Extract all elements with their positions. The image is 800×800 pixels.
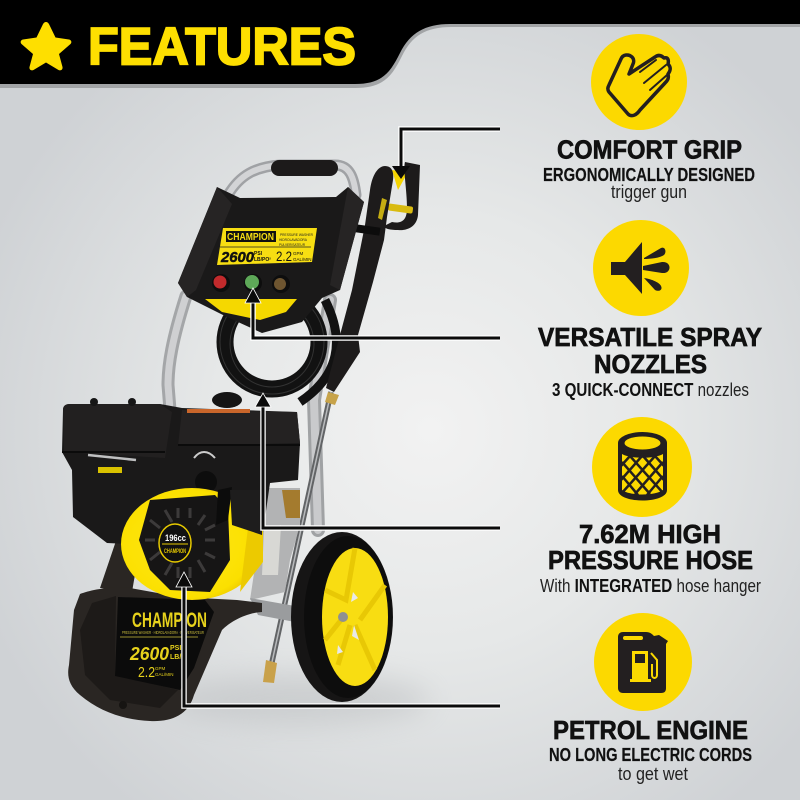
frame bucket: GAL/MIN [155, 672, 174, 677]
heading: COMFORT GRIP [557, 134, 742, 164]
control panel: PRESSURE WASHER [280, 232, 313, 237]
feature: comfort grip [543, 34, 755, 202]
heading: VERSATILE SPRAY [538, 322, 762, 352]
spray gun and lance [263, 162, 420, 683]
badge: 196cc: 196cc [165, 533, 186, 543]
handle frame [168, 165, 356, 530]
control panel: PSI [254, 251, 263, 257]
control panel: HIDROLAVADORA [279, 237, 307, 242]
control panel label [217, 228, 317, 265]
engine [62, 392, 300, 600]
control panel [178, 187, 364, 333]
frame bucket: PSI [170, 645, 181, 652]
control panel: 2600 [220, 249, 255, 266]
recoil housing yellow [121, 488, 263, 600]
control panel: GAL/MIN [293, 257, 312, 262]
subheading: ERGONOMICALLY DESIGNED [543, 164, 755, 185]
badge: 196cc [159, 524, 191, 562]
frame bucket: LB/P [170, 654, 186, 661]
icon: star [21, 22, 71, 70]
control panel: PULVERISATEUR [279, 242, 305, 247]
floor shadow [170, 675, 430, 725]
feature: hose [540, 417, 761, 596]
body text: to get wet [618, 764, 688, 784]
recoil cover [139, 495, 230, 592]
icon: fuel can [594, 613, 692, 711]
bucket label: CHAMPION [132, 609, 207, 632]
feature: spray nozzles [538, 220, 762, 400]
subheading: With INTEGRATED hose hanger [540, 576, 761, 596]
arrow: spray nozzles leader [245, 288, 500, 338]
header banner [0, 0, 800, 88]
icon: hose mesh [592, 417, 692, 517]
control panel: LB/PO² [254, 257, 271, 263]
heading: 7.62M HIGH [579, 519, 721, 549]
hose coil [220, 290, 336, 402]
control panel: CHAMPION [227, 232, 274, 243]
frame bucket: PRESSURE WASHER · HIDROLAVADORA · PULVERISATEUR [122, 630, 204, 635]
arrow: comfort grip leader [392, 129, 500, 179]
wheel [291, 532, 393, 702]
arrow: hose leader [255, 393, 500, 528]
heading: PETROL ENGINE [553, 715, 748, 745]
pump [250, 488, 300, 600]
nozzle holders [212, 274, 230, 292]
heading second line: NOZZLES [594, 349, 707, 379]
subheading: 3 QUICK-CONNECT nozzles [552, 380, 749, 400]
heading second line: PRESSURE HOSE [548, 545, 753, 575]
feature: petrol engine [549, 613, 752, 784]
icon: hand [591, 34, 687, 130]
body text: trigger gun [611, 182, 687, 202]
product: pressure washer [62, 162, 420, 721]
title: FEATURES [88, 18, 356, 76]
arrow: engine leader [176, 572, 500, 706]
control panel: GPM [293, 251, 304, 256]
badge: 196cc: CHAMPION [164, 548, 186, 555]
subheading: NO LONG ELECTRIC CORDS [549, 744, 752, 765]
frame bucket: 2600 [129, 644, 169, 664]
lower label [205, 299, 297, 320]
frame bucket [68, 535, 295, 721]
icon: spray [593, 220, 689, 316]
control panel: 2.2 [276, 248, 292, 264]
frame bucket: GPM [155, 666, 166, 671]
frame bucket: 2.2 [138, 664, 155, 681]
